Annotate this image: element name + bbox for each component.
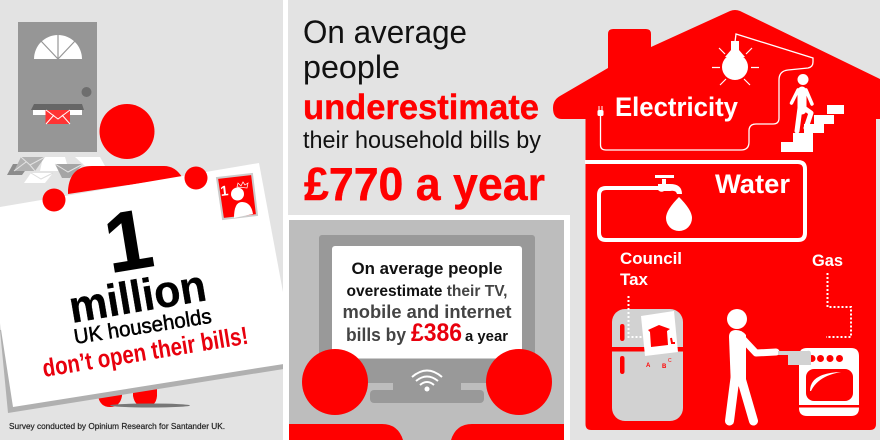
icon: fridge: A <box>646 363 651 369</box>
icon: TV <box>319 235 535 403</box>
icon: stairs <box>781 105 844 152</box>
icon: tap <box>655 175 682 194</box>
icon: fridge <box>612 296 683 421</box>
figure: person holding letter <box>68 104 190 408</box>
icon: light bulb <box>712 41 759 85</box>
electricity <box>598 34 844 152</box>
panel: underestimate headline: underestimate <box>303 88 539 127</box>
icon: envelopes on the floor <box>7 157 105 183</box>
TV text: mobile and internet <box>342 302 512 322</box>
TV text: overestimate their TV, <box>346 283 508 300</box>
icon: plug and wire <box>600 34 813 150</box>
water <box>585 162 805 240</box>
electricity: Electricity <box>615 92 738 122</box>
icon: wifi <box>412 370 442 392</box>
icon: person climbing stairs <box>792 74 812 131</box>
council tax <box>612 249 683 421</box>
card headline <box>44 210 248 376</box>
TV text <box>342 259 512 322</box>
card headline: million <box>65 260 210 333</box>
panel: left unopened bills <box>0 0 296 440</box>
icon: cooker <box>799 348 859 416</box>
TV text: amount line: bills by <box>346 325 406 345</box>
panel: underestimate headline: their household bills by <box>303 127 541 154</box>
panel: underestimate headline: £770 a year <box>304 158 545 210</box>
gas: Gas <box>812 251 843 270</box>
source note: Survey conducted by Opinium Research for Santander UK. <box>9 421 225 431</box>
TV text: amount line <box>346 319 508 347</box>
gas <box>799 251 859 416</box>
panel: underestimate headline: On average <box>303 14 467 50</box>
panel: underestimate headline <box>288 0 880 440</box>
house <box>553 10 880 430</box>
stamp: 1 <box>219 182 229 199</box>
icon: water drop <box>666 197 692 231</box>
icon: fridge: B <box>662 364 667 370</box>
water: Water <box>715 169 790 199</box>
icon: fridge: C <box>668 358 672 364</box>
icon: door <box>18 22 97 152</box>
card headline: 1 <box>98 190 159 291</box>
card headline: don’t open their bills! <box>40 322 250 383</box>
panel: TV, mobile and internet <box>289 220 564 440</box>
TV text: amount line: £386 <box>411 319 462 347</box>
council tax: Council <box>620 249 682 268</box>
card headline: UK households <box>72 305 213 349</box>
letter card <box>0 163 296 413</box>
council tax: Tax <box>620 270 649 289</box>
stamp <box>217 174 257 219</box>
panel: underestimate headline: people <box>303 49 400 85</box>
TV text: On average people <box>352 259 502 278</box>
hands and arms <box>289 349 564 440</box>
TV text: amount line: a year <box>465 328 508 345</box>
hands <box>42 166 208 212</box>
icon: person cooking <box>727 309 811 421</box>
